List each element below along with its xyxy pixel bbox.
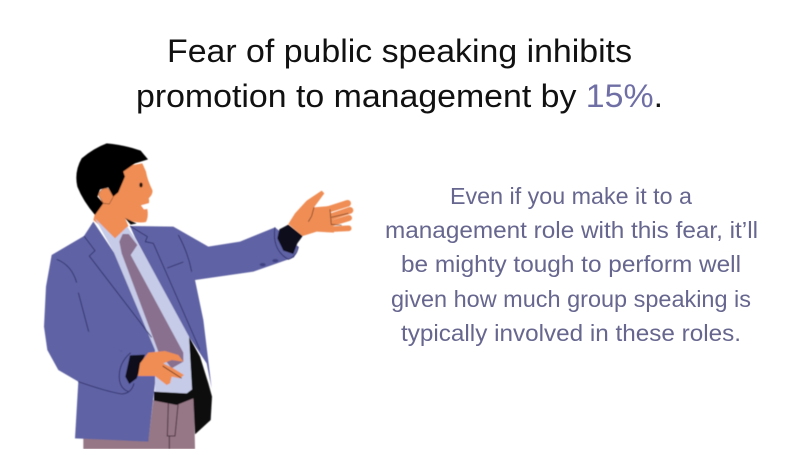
body text [385, 183, 758, 346]
black lining and belt [154, 337, 212, 434]
lower hand [138, 351, 184, 385]
neck and face [93, 163, 153, 240]
shirt [95, 218, 192, 393]
body text: be mighty tough to perform well [401, 251, 741, 277]
body text: Even if you make it to a [450, 183, 693, 209]
raised cuff [277, 225, 303, 254]
title [136, 33, 663, 114]
pointing hand [288, 191, 350, 236]
jacket seams [57, 226, 298, 352]
body text: typically involved in these roles. [401, 320, 741, 346]
trousers [83, 398, 195, 449]
tie [119, 234, 183, 368]
title: Fear of public speaking inhibits [167, 33, 632, 69]
jacket [44, 222, 298, 442]
hair [76, 143, 148, 215]
title: promotion to management by 15%. [136, 78, 663, 114]
lower sleeve and cuff [57, 317, 145, 394]
eye [139, 183, 143, 187]
illustration: businessman presenting [44, 143, 350, 449]
chin shadow [125, 218, 137, 225]
body text: management role with this fear, it’ll [385, 217, 758, 243]
ear [98, 188, 113, 204]
mouth [141, 203, 150, 209]
body text: given how much group speaking is [391, 286, 751, 312]
